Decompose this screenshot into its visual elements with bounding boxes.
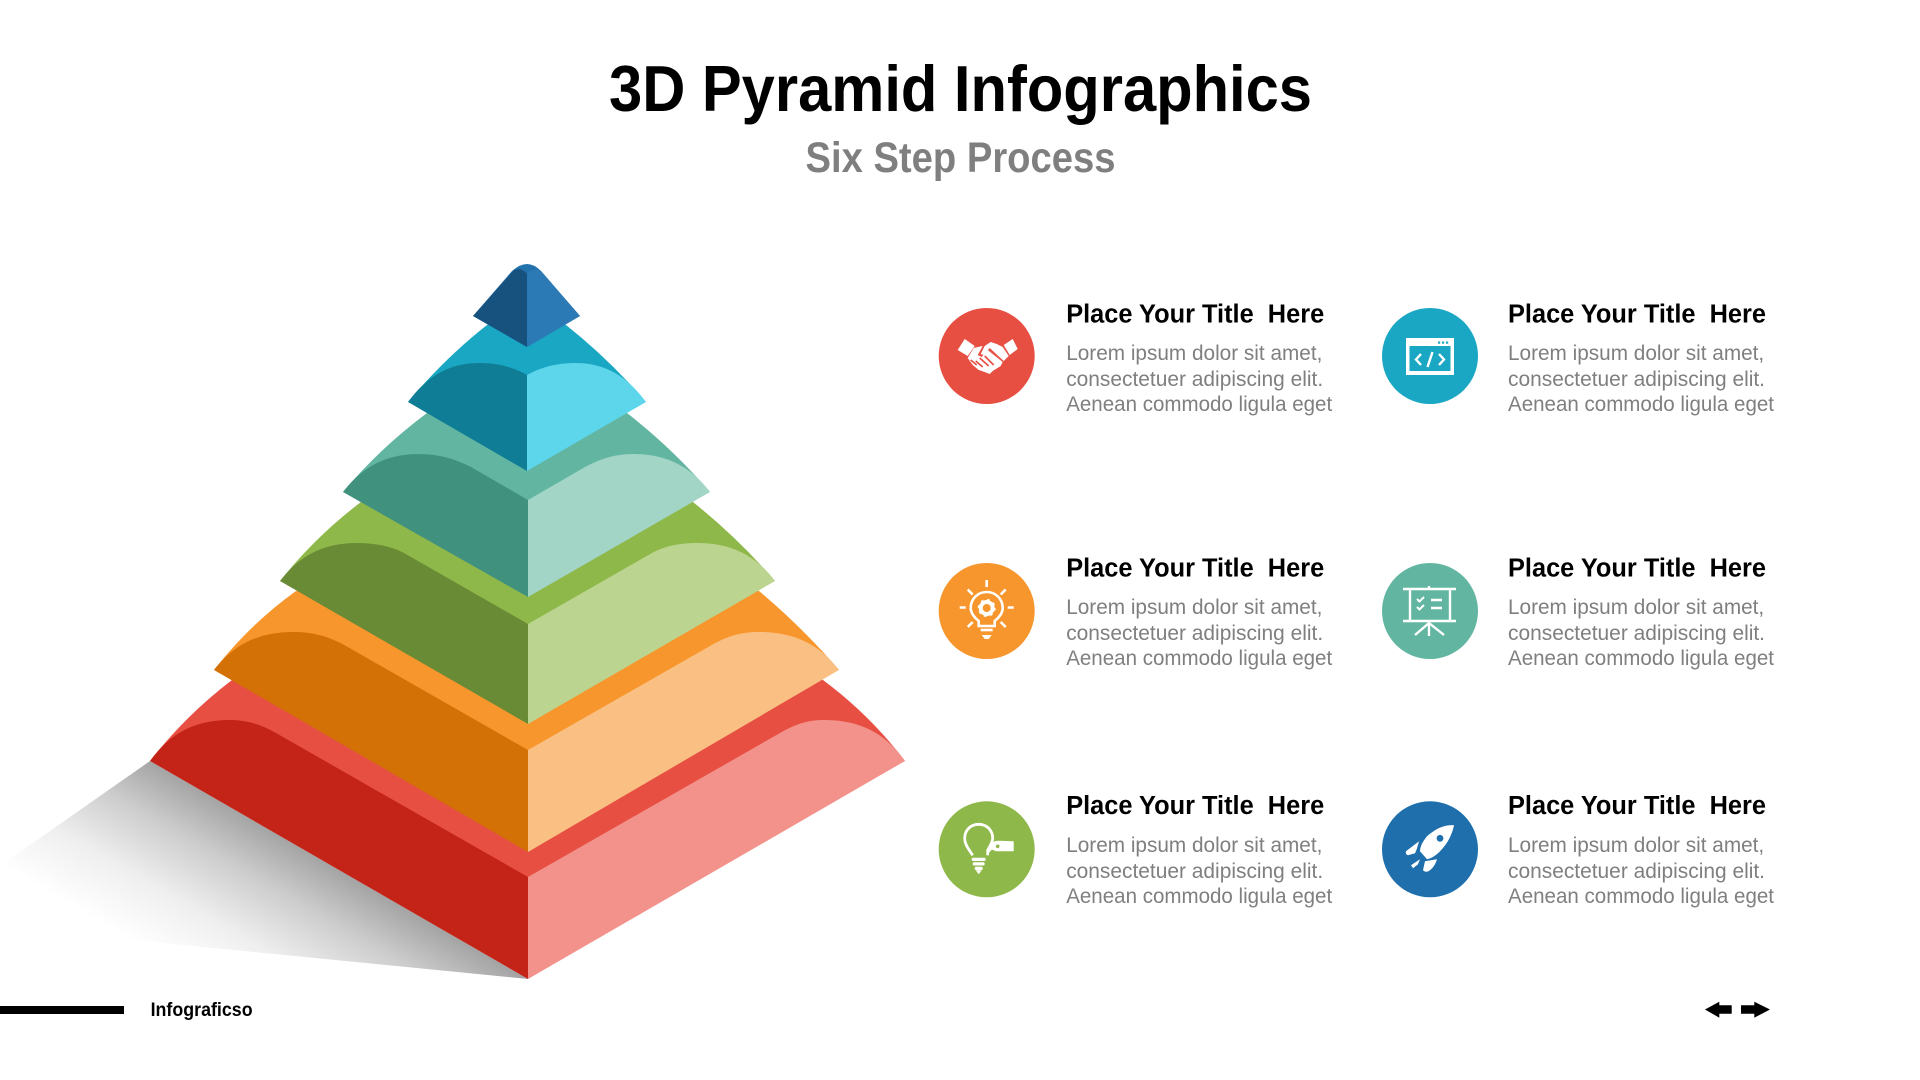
tier 4: teal: [343, 390, 710, 597]
tier 5: cyan: [408, 310, 646, 471]
item: red handshake: [939, 301, 1332, 416]
tier 1: red base: [150, 640, 905, 979]
pyramid shadow: [0, 761, 528, 979]
item: blue rocket: [1382, 792, 1774, 908]
icon: presentation board: [1382, 563, 1478, 659]
item body: consectetuer adipiscing elit.: [1066, 621, 1323, 645]
footer bar: [0, 1006, 124, 1014]
item: orange idea: [939, 555, 1332, 670]
item body: consectetuer adipiscing elit.: [1508, 859, 1765, 883]
item heading: Place Your Title Here: [1508, 301, 1766, 329]
item body: [1508, 341, 1774, 416]
item body: consectetuer adipiscing elit.: [1508, 621, 1765, 645]
icon: bulb with tag: [939, 801, 1035, 897]
item body: Aenean commodo ligula eget: [1508, 884, 1774, 908]
item body: Aenean commodo ligula eget: [1066, 646, 1332, 670]
item body: Aenean commodo ligula eget: [1508, 392, 1774, 416]
item heading: Place Your Title Here: [1066, 792, 1324, 820]
item: cyan code: [1382, 301, 1774, 416]
item body: Lorem ipsum dolor sit amet,: [1066, 595, 1322, 619]
subtitle: Six Step Process: [806, 134, 1116, 182]
item body: Lorem ipsum dolor sit amet,: [1066, 833, 1322, 857]
item body: consectetuer adipiscing elit.: [1066, 367, 1323, 391]
item body: Aenean commodo ligula eget: [1508, 646, 1774, 670]
tier 2: orange: [214, 550, 839, 852]
item body: [1066, 341, 1332, 416]
item heading: Place Your Title Here: [1066, 301, 1324, 329]
item body: consectetuer adipiscing elit.: [1066, 859, 1323, 883]
title: 3D Pyramid Infographics: [609, 52, 1312, 125]
icon: rocket: [1382, 801, 1478, 897]
item body: [1508, 595, 1774, 670]
icon: code window: [1382, 308, 1478, 404]
pyramid: [150, 264, 905, 979]
tier 6: blue top: [473, 264, 580, 347]
icon: handshake: [939, 308, 1035, 404]
item body: Aenean commodo ligula eget: [1066, 884, 1332, 908]
footer brand: Infograficso: [151, 1000, 253, 1021]
arrow: next: [1741, 1002, 1770, 1018]
item body: Lorem ipsum dolor sit amet,: [1066, 341, 1322, 365]
item body: Lorem ipsum dolor sit amet,: [1508, 595, 1764, 619]
item body: Lorem ipsum dolor sit amet,: [1508, 833, 1764, 857]
item body: Aenean commodo ligula eget: [1066, 392, 1332, 416]
item body: [1066, 833, 1332, 908]
item body: [1066, 595, 1332, 670]
item body: [1508, 833, 1774, 908]
item heading: Place Your Title Here: [1066, 555, 1324, 583]
item: green tagged bulb: [939, 792, 1332, 908]
arrow: previous: [1705, 1002, 1732, 1018]
item: teal presentation: [1382, 555, 1774, 670]
tier 3: green: [280, 470, 775, 724]
item heading: Place Your Title Here: [1508, 792, 1766, 820]
item body: consectetuer adipiscing elit.: [1508, 367, 1765, 391]
item body: Lorem ipsum dolor sit amet,: [1508, 341, 1764, 365]
icon: light bulb with gear: [939, 563, 1035, 659]
item heading: Place Your Title Here: [1508, 555, 1766, 583]
